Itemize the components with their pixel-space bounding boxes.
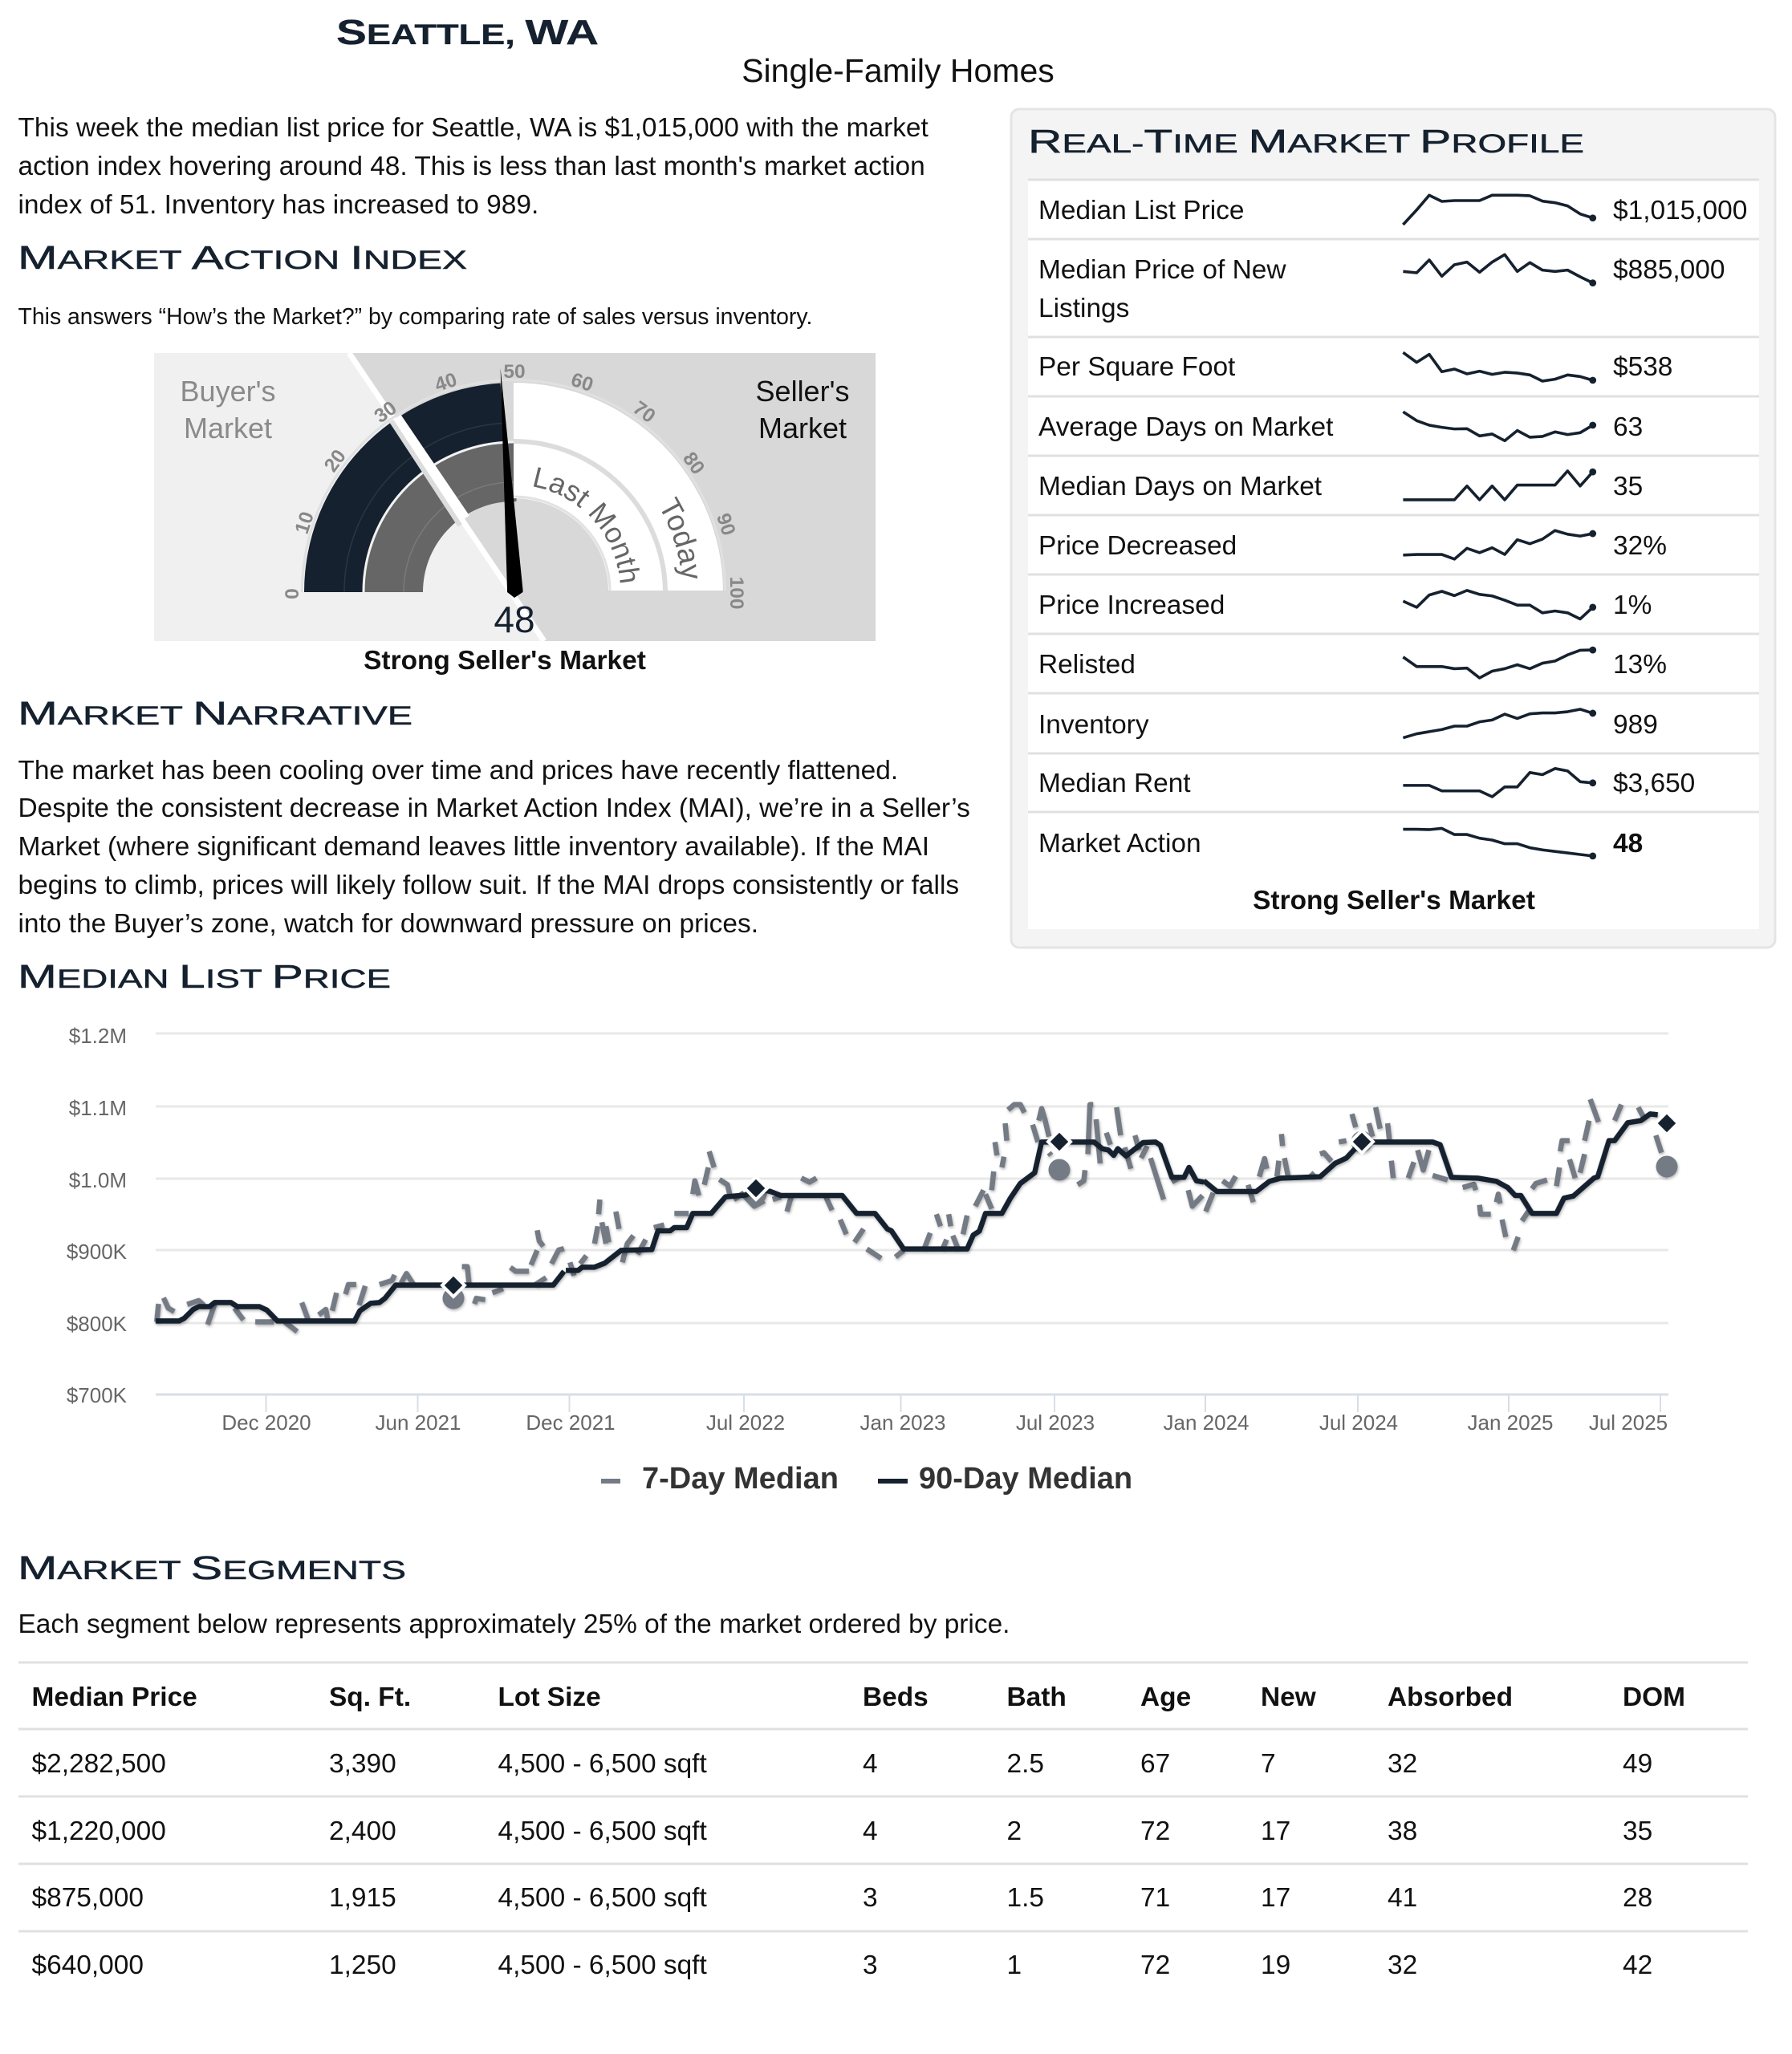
gauge label: buyer's market: Market <box>184 412 272 444</box>
table row 4: 32 <box>1388 1950 1417 1980</box>
row: average days on market <box>1038 412 1643 442</box>
row: median price of new listings: Listings <box>1038 294 1129 323</box>
row: per square foot: $538 <box>1613 352 1672 382</box>
table row 1: 3,390 <box>329 1749 396 1779</box>
table row 1: 49 <box>1623 1749 1652 1779</box>
row: median days on market: 35 <box>1613 472 1643 501</box>
gauge scale labels: 100 <box>725 577 747 609</box>
x axis labels: Jul 2023 <box>1016 1411 1095 1435</box>
table row 3: 1.5 <box>1006 1883 1044 1913</box>
table row 4: 42 <box>1623 1950 1652 1980</box>
table header: Beds <box>863 1683 929 1712</box>
row: average days on market: 63 <box>1613 412 1643 442</box>
gauge arc: remaining white <box>514 383 723 591</box>
gauge scale labels: 20 <box>320 446 351 477</box>
x axis labels: Jul 2025 <box>1589 1411 1668 1435</box>
heading: market narrative: M ARKET N ARRATIVE <box>18 695 412 732</box>
market action index description: This answers “How’s the Market?” by comparing rate of sales versus inventory. <box>18 304 812 330</box>
panel: real-time market profile <box>1011 109 1775 948</box>
row: price decreased: 32% <box>1613 531 1667 561</box>
table row 2: 17 <box>1261 1817 1290 1846</box>
gauge scale labels: 40 <box>433 369 460 396</box>
table header: Lot Size <box>498 1683 601 1712</box>
table row 1: 67 <box>1140 1749 1170 1779</box>
table header: DOM <box>1623 1683 1685 1712</box>
row: price increased: 1% <box>1613 591 1652 620</box>
row: per square foot <box>1038 352 1672 384</box>
table: market segments <box>18 1662 1748 1980</box>
intro paragraph: action index hovering around 48. This is less than last month's market action <box>18 152 925 181</box>
table row 2: 2,400 <box>329 1817 396 1846</box>
table header: New <box>1261 1683 1317 1712</box>
gauge scale labels: 90 <box>712 511 739 538</box>
chart legend: 7-Day Median <box>642 1462 839 1496</box>
panel caption: Strong Seller's Market <box>1253 886 1535 915</box>
gauge scale labels <box>282 361 747 609</box>
x axis labels <box>221 1411 1668 1435</box>
table row 4 <box>32 1950 1652 1980</box>
series: 7-day median <box>156 1099 1678 1332</box>
row: median price of new listings: $885,000 <box>1613 255 1725 285</box>
x axis labels: Jul 2024 <box>1319 1411 1398 1435</box>
table row 3: $875,000 <box>32 1883 144 1913</box>
market narrative paragraph: Market (where significant demand leaves little inventory available). If the MAI <box>18 832 929 862</box>
title: SEATTLE, WA <box>336 13 599 52</box>
table row 4: 1,250 <box>329 1950 396 1980</box>
gauge value: 48 <box>494 599 535 640</box>
table row 4: 4,500 - 6,500 sqft <box>498 1950 707 1980</box>
y axis labels <box>67 1024 128 1407</box>
table row 2: 4 <box>863 1817 878 1846</box>
y axis labels: $700K <box>67 1383 128 1407</box>
gauge scale labels: 60 <box>568 369 595 396</box>
gauge label: today: Today <box>661 496 698 579</box>
table row 3: 28 <box>1623 1883 1652 1913</box>
chart legend <box>601 1462 1132 1496</box>
gauge needle <box>501 368 523 598</box>
row: relisted <box>1038 647 1667 680</box>
table row 3: 4,500 - 6,500 sqft <box>498 1883 707 1913</box>
heading: median list price: M EDIAN L IST P RICE <box>18 958 391 995</box>
y axis labels: $1.1M <box>69 1096 127 1120</box>
table row 2: 72 <box>1140 1817 1170 1846</box>
market narrative paragraph: Despite the consistent decrease in Market Action Index (MAI), we’re in a Seller’s <box>18 794 970 823</box>
market narrative paragraph: begins to climb, prices will likely follow suit. If the MAI drops consistently or falls <box>18 871 959 900</box>
gauge label: last month: Last Month <box>533 467 640 583</box>
row: price increased <box>1038 591 1652 620</box>
gauge label: seller's market: Seller's <box>756 375 849 408</box>
table header: Median Price <box>32 1683 197 1712</box>
table row 3: 41 <box>1388 1883 1417 1913</box>
row: median rent: $3,650 <box>1613 769 1695 798</box>
table row 2 <box>32 1817 1652 1846</box>
gauge scale labels: 80 <box>678 449 709 479</box>
x axis labels: Jan 2023 <box>860 1411 945 1435</box>
gauge scale labels: 30 <box>371 397 401 428</box>
y axis labels: $800K <box>67 1312 128 1336</box>
row: market action: Market Action <box>1038 829 1201 859</box>
y axis labels: $1.0M <box>69 1168 127 1192</box>
table row 1: 7 <box>1261 1749 1276 1779</box>
table row 1: 2.5 <box>1006 1749 1044 1779</box>
table row 2: $1,220,000 <box>32 1817 166 1846</box>
row: inventory: Inventory <box>1038 710 1149 740</box>
gauge scale labels: 0 <box>282 588 303 599</box>
table row 3: 3 <box>863 1883 878 1913</box>
table row 3: 71 <box>1140 1883 1170 1913</box>
x axis labels: Jan 2025 <box>1468 1411 1553 1435</box>
row: market action <box>1038 828 1643 859</box>
panel heading: R EAL- T IME M ARKET P ROFILE <box>1028 123 1584 160</box>
x axis labels: Dec 2021 <box>526 1411 616 1435</box>
x axis labels: Jul 2022 <box>706 1411 785 1435</box>
table row 2: 2 <box>1006 1817 1022 1846</box>
gauge label: buyer's market <box>181 375 275 444</box>
table header: Age <box>1140 1683 1191 1712</box>
y axis labels: $1.2M <box>69 1024 127 1048</box>
x axis labels: Dec 2020 <box>221 1411 311 1435</box>
row: median days on market <box>1038 469 1643 501</box>
table row 1: 32 <box>1388 1749 1417 1779</box>
row: average days on market: Average Days on Market <box>1038 412 1334 442</box>
market narrative paragraph: The market has been cooling over time and prices have recently flattened. <box>18 756 898 785</box>
gauge scale labels: 50 <box>503 361 526 383</box>
x axis labels: Jan 2024 <box>1164 1411 1249 1435</box>
market narrative paragraph <box>18 756 970 939</box>
row: price decreased <box>1038 530 1667 561</box>
gauge scale labels: 10 <box>291 509 319 537</box>
markers: 90-day diamonds <box>442 1112 1678 1297</box>
table row 2: 38 <box>1388 1817 1417 1846</box>
row: inventory <box>1038 709 1658 740</box>
table row 1 <box>32 1749 1652 1779</box>
subtitle: Single-Family Homes <box>742 52 1054 89</box>
table row 2: 4,500 - 6,500 sqft <box>498 1817 707 1846</box>
row: median list price <box>1038 195 1747 225</box>
heading: market segments: M ARKET S EGMENTS <box>18 1549 406 1586</box>
gauge chart <box>154 353 876 641</box>
table row 3: 17 <box>1261 1883 1290 1913</box>
x axis labels: Jun 2021 <box>376 1411 461 1435</box>
table row 3: 1,915 <box>329 1883 396 1913</box>
table row 4: 19 <box>1261 1950 1290 1980</box>
line chart: median list price <box>67 1024 1678 1435</box>
market segments description: Each segment below represents approximately 25% of the market ordered by price. <box>18 1610 1010 1639</box>
series: 90-day median <box>156 1114 1658 1321</box>
row: median days on market: Median Days on Market <box>1038 472 1323 501</box>
gauge arc: today value <box>304 384 504 592</box>
gauge scale labels: 70 <box>628 397 659 428</box>
heading: market action index: M ARKET A CTION INDEX <box>18 239 467 276</box>
table row 3 <box>32 1883 1652 1913</box>
row: price increased: Price Increased <box>1038 591 1225 620</box>
row: median price of new listings <box>1038 254 1725 323</box>
row: relisted: Relisted <box>1038 650 1136 680</box>
gauge arc: last month value <box>364 443 518 592</box>
row: median rent <box>1038 769 1695 798</box>
gauge label: seller's market <box>756 375 849 444</box>
intro paragraph <box>18 113 929 220</box>
table row 1: 4 <box>863 1749 878 1779</box>
table row 2: 35 <box>1623 1817 1652 1846</box>
table header: Bath <box>1006 1683 1067 1712</box>
gauge label: buyer's market: Buyer's <box>181 375 275 408</box>
row: relisted: 13% <box>1613 650 1667 680</box>
row: inventory: 989 <box>1613 710 1658 740</box>
table row 4: 3 <box>863 1950 878 1980</box>
table header: Absorbed <box>1388 1683 1513 1712</box>
table row 1: $2,282,500 <box>32 1749 166 1779</box>
row: median list price: $1,015,000 <box>1613 196 1747 225</box>
gauge label: seller's market: Market <box>758 412 847 444</box>
table header: Sq. Ft. <box>329 1683 411 1712</box>
gauge caption: Strong Seller's Market <box>364 646 646 676</box>
table row 4: 72 <box>1140 1950 1170 1980</box>
row: median list price: Median List Price <box>1038 196 1244 225</box>
market narrative paragraph: into the Buyer’s zone, watch for downward pressure on prices. <box>18 909 758 939</box>
table header <box>32 1683 1685 1712</box>
y axis labels: $900K <box>67 1240 128 1264</box>
table row 4: 1 <box>1006 1950 1022 1980</box>
intro paragraph: This week the median list price for Seattle, WA is $1,015,000 with the market <box>18 113 929 143</box>
intro paragraph: index of 51. Inventory has increased to 989. <box>18 190 538 220</box>
table row 1: 4,500 - 6,500 sqft <box>498 1749 707 1779</box>
row: market action: 48 <box>1613 829 1643 859</box>
row: median rent: Median Rent <box>1038 769 1191 798</box>
row: price decreased: Price Decreased <box>1038 531 1237 561</box>
chart legend: 90-Day Median <box>919 1462 1132 1496</box>
table row 4: $640,000 <box>32 1950 144 1980</box>
row: per square foot: Per Square Foot <box>1038 352 1236 382</box>
row: median price of new listings: Median Price of New <box>1038 255 1286 285</box>
